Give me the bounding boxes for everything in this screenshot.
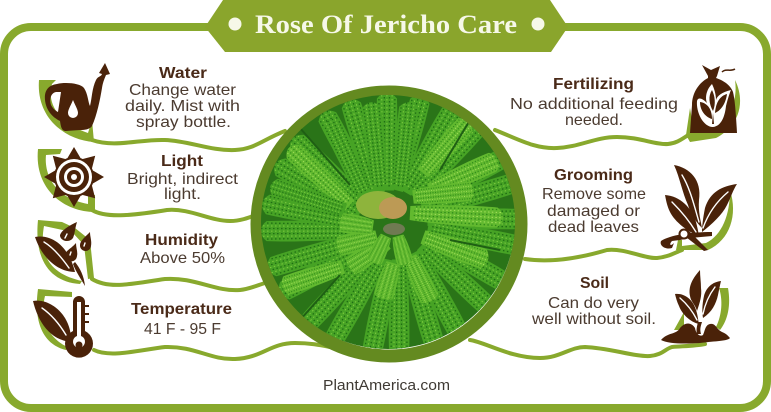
plant photo xyxy=(257,92,526,358)
title banner xyxy=(205,0,568,52)
text: water xyxy=(125,82,240,131)
item: soil xyxy=(531,270,730,344)
text: grooming: damaged or xyxy=(547,203,641,220)
text: soil: well without soil. xyxy=(531,311,656,328)
text: soil xyxy=(531,295,656,328)
text: soil: Can do very xyxy=(548,295,639,312)
title: Rose Of Jericho Care xyxy=(255,10,517,39)
source credit: PlantAmerica.com xyxy=(323,377,450,394)
text: light: Bright, indirect xyxy=(127,171,239,188)
icon: fertilizer bag xyxy=(690,65,737,133)
text: water: daily. Mist with xyxy=(125,98,240,115)
heading: grooming: Grooming xyxy=(554,167,633,184)
heading: water: Water xyxy=(159,65,207,82)
text: fertilizing: No additional feeding xyxy=(510,96,678,113)
item: water xyxy=(39,63,240,142)
leaf backing: soil xyxy=(674,288,729,330)
text: light xyxy=(127,171,239,203)
connector waves xyxy=(92,130,705,359)
icon: watering can xyxy=(45,63,110,131)
icon: leaf and thermometer xyxy=(33,296,93,358)
icon: plant in soil xyxy=(661,270,730,344)
leaf backing: fertilizing xyxy=(686,80,740,142)
text: fertilizing: needed. xyxy=(565,112,623,129)
heading: fertilizing: Fertilizing xyxy=(553,76,634,93)
leaf backing: temperature xyxy=(37,289,72,350)
text: temperature: 41 F - 95 F xyxy=(144,321,221,338)
text: fertilizing xyxy=(510,96,678,129)
heading: soil: Soil xyxy=(580,275,609,292)
icon: leaves and shears xyxy=(661,165,737,251)
item: humidity xyxy=(35,220,225,286)
item: light xyxy=(38,147,239,212)
text: humidity: Above 50% xyxy=(140,250,225,267)
text: light: light. xyxy=(164,186,201,203)
heading: humidity: Humidity xyxy=(145,232,218,249)
leaf backing: water xyxy=(39,80,94,142)
text: grooming: dead leaves xyxy=(548,219,639,236)
text: water: spray bottle. xyxy=(136,114,231,131)
leaf backing: grooming xyxy=(676,190,733,250)
icon: leaf and drops xyxy=(35,222,91,286)
text: grooming: Remove some xyxy=(542,186,646,203)
heading: light: Light xyxy=(161,153,204,170)
item: temperature xyxy=(33,289,232,358)
item: grooming xyxy=(542,165,737,251)
item: fertilizing xyxy=(510,65,740,142)
text: water: Change water xyxy=(129,82,237,99)
heading: temperature: Temperature xyxy=(131,301,232,318)
text: grooming xyxy=(542,186,646,236)
icon: sun xyxy=(44,147,104,207)
leaf backing: humidity xyxy=(37,220,94,284)
leaf backing: light xyxy=(38,149,95,212)
